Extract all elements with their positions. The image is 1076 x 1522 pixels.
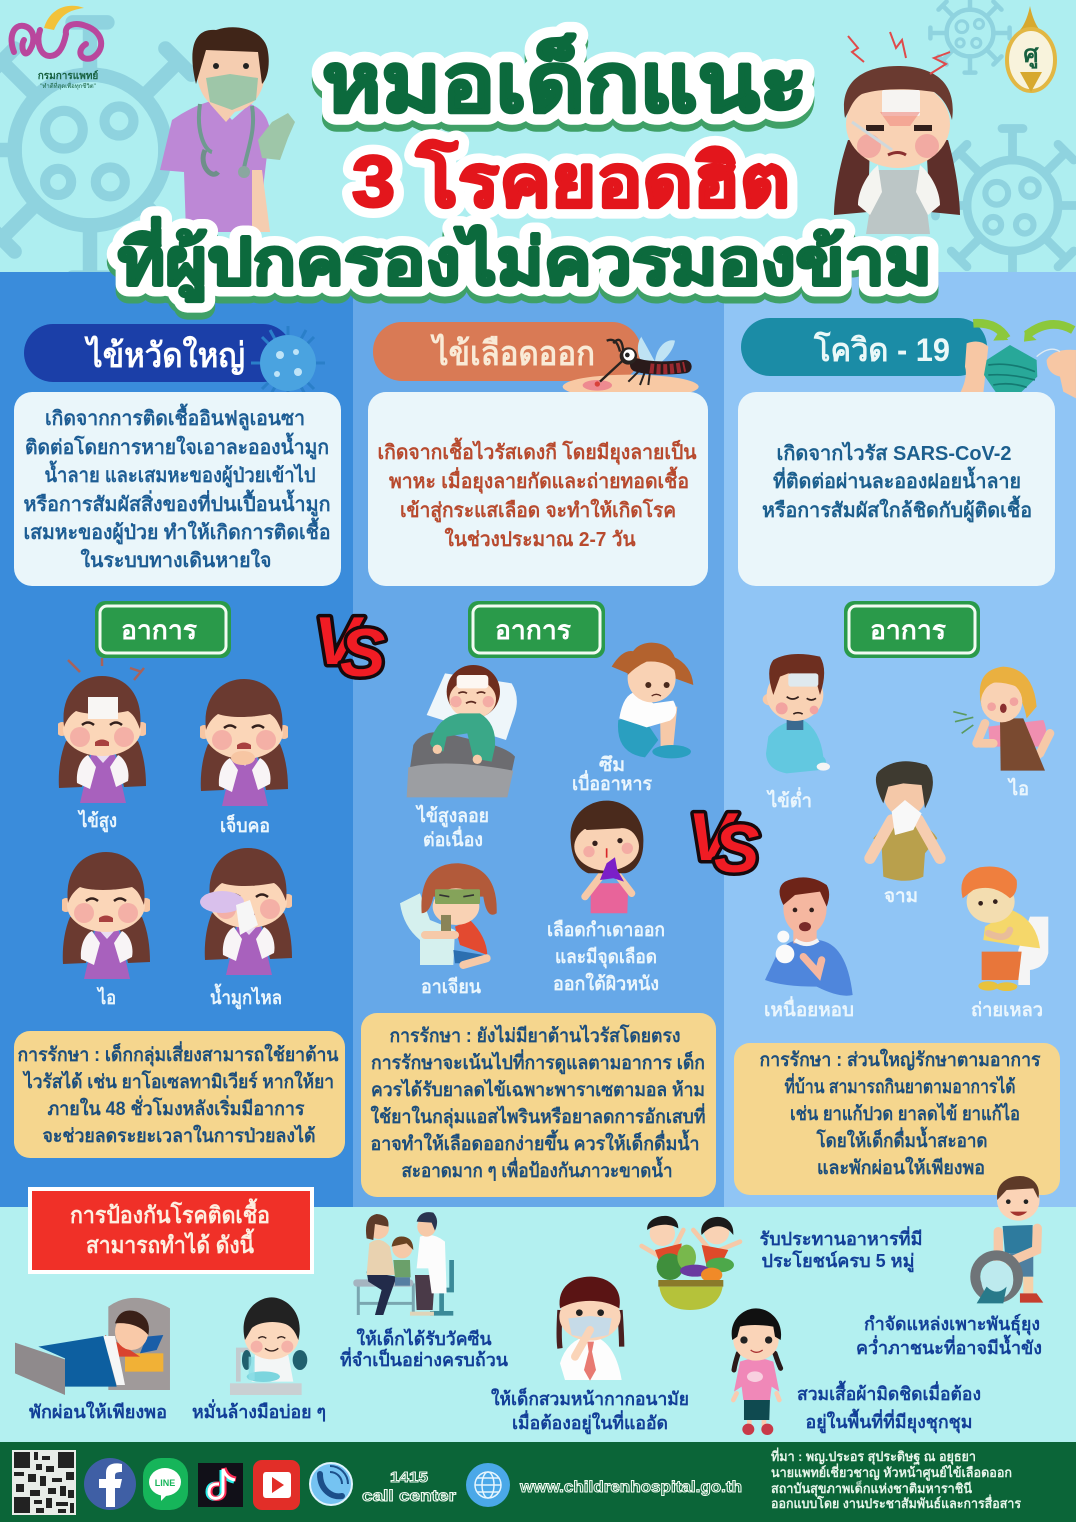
treatment card: covid-19: การรักษา : ส่วนใหญ่รักษาตามอาการ	[760, 1048, 1041, 1071]
info card: influenza: น้ำลาย และเสมหะของผู้ป่วยเข้าไป	[44, 460, 316, 489]
icon: VS badge 2: V	[688, 799, 739, 875]
icon: VS badge 2	[688, 799, 759, 887]
prevention heading: สามารถทำได้ ดังนี้	[86, 1228, 255, 1258]
prevention: eliminate breeding sites: กำจัดแหล่งเพาะพันธุ์ยุง	[864, 1313, 1040, 1336]
heading pill: influenza	[24, 324, 292, 382]
symptom: persistent high fever: ต่อเนื่อง	[423, 826, 483, 851]
symptom: nosebleed and skin bleeding: เลือดกำเดาออก	[547, 919, 665, 941]
top header background	[0, 0, 1076, 273]
heading pill: dengue: ไข้เลือดออก	[430, 333, 595, 373]
info card: dengue: เกิดจากเชื้อไวรัสเดงกี โดยมียุงลายเป็น	[378, 437, 697, 465]
treatment card: dengue: ใช้ยาในกลุ่มแอสไพรินหรือยาลดการอักเสบที่	[370, 1103, 706, 1129]
source credit: สถาบันสุขภาพเด็กแห่งชาติมหาราชินี	[771, 1479, 972, 1497]
icon: globe	[466, 1463, 510, 1507]
info card: dengue: เข้าสู่กระแสเลือด จะทำให้เกิดโรค	[400, 498, 676, 524]
heading pill: dengue	[373, 322, 641, 381]
icon: phone	[310, 1463, 352, 1505]
symptoms button: อาการ	[870, 615, 946, 645]
prevention: wash hands: หมั่นล้างมือบ่อย ๆ	[192, 1399, 326, 1422]
prevention: healthy food: รับประทานอาหารที่มี	[760, 1226, 922, 1249]
prevention: long clothing	[732, 1308, 981, 1435]
call center number	[362, 1469, 456, 1505]
prevention heading: การป้องกันโรคติดเชื้อ	[70, 1198, 270, 1228]
info card: dengue: ในช่วงประมาณ 2-7 วัน	[444, 527, 636, 551]
prevention: eliminate breeding sites	[856, 1176, 1043, 1358]
source credit: ออกแบบโดย งานประชาสัมพันธ์และการสื่อสาร	[771, 1494, 1021, 1511]
symptom: lethargic, loss of appetite: ซึม	[599, 754, 625, 776]
icon: VS badge 1: S	[340, 615, 385, 691]
symptoms button: อาการ	[121, 615, 197, 645]
info card: dengue: พาหะ เมื่อยุงลายกัดและถ่ายทอดเชื้อ	[389, 466, 689, 494]
prevention: wash hands	[192, 1297, 326, 1422]
call center number: call center	[362, 1488, 456, 1505]
symptom: persistent high fever: ไข้สูงลอย	[415, 804, 489, 828]
column backgrounds	[0, 272, 1076, 1208]
symptom: sore throat: เจ็บคอ	[220, 813, 270, 837]
symptom: sneeze: จาม	[884, 886, 918, 907]
panel: dengue	[361, 322, 716, 1197]
symptom: cough	[953, 667, 1050, 800]
symptom: sneeze	[870, 761, 940, 907]
symptom: vomiting: อาเจียน	[421, 976, 481, 998]
symptom: low fever	[763, 654, 830, 812]
panel: influenza	[14, 324, 345, 1158]
prevention: long clothing: สวมเสื้อผ้ามิดชิดเมื่อต้อง	[797, 1380, 981, 1404]
treatment card: covid-19: และพักผ่อนให้เพียงพอ	[817, 1156, 985, 1179]
prevention: vaccination: ที่จำเป็นอย่างครบถ้วน	[340, 1347, 509, 1370]
info card: influenza: ในระบบทางเดินหายใจ	[80, 548, 272, 572]
info card: influenza: ติดต่อโดยการหายใจเอาละอองน้ำมูก	[25, 432, 329, 461]
logo: hospital emblem	[1007, 6, 1055, 92]
title line 1: หมอเด็กแนะ	[322, 40, 808, 136]
prevention: vaccination	[340, 1212, 509, 1370]
symptom: cough: ไอ	[96, 986, 116, 1009]
symptom: shortness of breath	[764, 877, 854, 1021]
icon: blue virus	[251, 326, 325, 400]
treatment card: dengue: ควรได้รับยาลดไข้เฉพาะพาราเซตามอล ห้าม	[371, 1078, 705, 1101]
title line 2: 3 โรคยอดฮิต	[352, 138, 790, 222]
info card: influenza	[14, 392, 341, 586]
treatment card: covid-19: โดยให้เด็กดื่มน้ำสะอาด	[816, 1126, 988, 1152]
info card: covid-19: ที่ติดต่อผ่านละอองฝอยน้ำลาย	[773, 466, 1021, 493]
prevention: rest	[15, 1298, 170, 1422]
QR code	[12, 1450, 76, 1515]
icon: mosquito on skin	[563, 336, 699, 399]
symptom: lethargic, loss of appetite: เบื่ออาหาร	[572, 770, 653, 795]
symptom: low fever: ไข้ต่ำ	[766, 787, 812, 812]
heading pill: covid-19: โควิด - 19	[813, 331, 950, 368]
icon: VS badge 1: V	[314, 603, 365, 679]
treatment card: covid-19: เช่น ยาแก้ปวด ยาลดไข้ ยาแก้ไอ	[790, 1102, 1020, 1125]
icon: line	[143, 1458, 188, 1510]
logo: 72nd anniversary mark	[12, 6, 101, 90]
info card: covid-19: หรือการสัมผัสใกล้ชิดกับผู้ติดเชื้อ	[762, 495, 1032, 524]
prevention: wear mask: ให้เด็กสวมหน้ากากอนามัย	[491, 1387, 689, 1409]
info card: covid-19: เกิดจากไวรัส SARS-CoV-2	[776, 441, 1012, 465]
treatment card: covid-19: ที่บ้าน สามารถกินยาตามอาการได้	[784, 1073, 1016, 1098]
symptom: diarrhea	[961, 867, 1048, 1021]
symptom: nosebleed and skin bleeding: และมีจุดเลือด	[555, 946, 657, 969]
symptom: persistent high fever	[407, 665, 517, 851]
symptom: high fever: ไข้สูง	[77, 809, 117, 833]
icon: tiktok	[198, 1463, 243, 1507]
symptom: high fever	[56, 658, 148, 833]
symptom: sore throat	[198, 679, 290, 837]
call center number: 1415	[390, 1469, 428, 1486]
prevention: long clothing: อยู่ในพื้นที่ที่มียุงชุกชุม	[806, 1408, 972, 1434]
footer	[0, 1442, 1076, 1522]
symptom: lethargic, loss of appetite	[572, 643, 693, 795]
symptoms button: อาการ	[495, 615, 571, 645]
symptom: vomiting	[400, 863, 497, 998]
illustration: sick girl with fever	[834, 32, 960, 234]
treatment card: influenza: จะช่วยลดระยะเวลาในการป่วยลงได้	[42, 1124, 316, 1147]
symptom: cough: ไอ	[1007, 777, 1029, 800]
treatment card: dengue: สะอาดมาก ๆ เพื่อป้องกันภาวะขาดน้ำ	[402, 1156, 672, 1182]
title	[118, 33, 932, 309]
website: www.childrenhospital.go.th	[519, 1479, 742, 1496]
info card: influenza: หรือการสัมผัสสิ่งของที่ปนเปื้อนน้ำมูก	[24, 489, 330, 518]
info card: dengue	[368, 392, 708, 586]
prevention: healthy food	[642, 1216, 922, 1310]
symptoms button	[844, 601, 980, 658]
info card: covid-19	[738, 392, 1055, 586]
title line 3: ที่ผู้ปกครองไม่ควรมองข้าม	[118, 217, 932, 302]
treatment card: covid-19	[734, 1043, 1060, 1195]
prevention: healthy food: ประโยชน์ครบ 5 หมู่	[762, 1250, 914, 1273]
treatment card: dengue: การรักษาจะเน้นไปที่การดูแลตามอาการ เด็ก	[371, 1049, 705, 1075]
treatment card: influenza: ไวรัสได้ เช่น ยาโอเซลทามิเวียร์ หากให้ยา	[22, 1070, 334, 1093]
icon: VS badge 2: S	[714, 811, 759, 887]
symptom: nosebleed and skin bleeding	[547, 801, 665, 995]
title line 1: หมอเด็กแนะ	[322, 33, 808, 129]
info card: influenza: เกิดจากการติดเชื้ออินฟลูเอนซา	[45, 403, 305, 432]
treatment card: influenza	[14, 1031, 345, 1158]
panel: covid-19	[734, 318, 1076, 1195]
symptoms button	[95, 601, 231, 658]
treatment card: dengue: อาจทำให้เลือดออกง่ายขึ้น ควรให้เด็กดื่มน้ำ	[370, 1129, 700, 1155]
source credit: นายแพทย์เชี่ยวชาญ หัวหน้าศูนย์ไข้เลือดออก	[771, 1463, 1012, 1481]
heading pill: influenza: ไข้หวัดใหญ่	[84, 335, 245, 376]
source credit: ที่มา : พญ.ประอร สุประดิษฐ ณ อยุธยา	[771, 1447, 976, 1466]
illustration: doctor	[160, 27, 295, 232]
icon: hands holding mask	[960, 323, 1076, 398]
logo: 72nd anniversary mark: "ทำดีที่สุดเพื่อทุกชีวิต"	[40, 82, 96, 90]
symptom: runny nose: น้ำมูกไหล	[210, 983, 282, 1010]
logo: 72nd anniversary mark: กรมการแพทย์	[38, 70, 98, 82]
title line 3	[118, 217, 932, 309]
treatment card: influenza: ภายใน 48 ชั่วโมงหลังเริ่มมีอาการ	[48, 1095, 305, 1120]
prevention: eliminate breeding sites: คว่ำภาชนะที่อาจมีน้ำขัง	[856, 1334, 1042, 1358]
prevention heading	[30, 1189, 312, 1272]
logo: hospital emblem: ศู	[1023, 41, 1039, 69]
bottom prevention background	[0, 1207, 1076, 1443]
icon: VS badge 1	[314, 603, 385, 691]
background virus pattern	[0, 0, 1076, 283]
symptom: nosebleed and skin bleeding: ออกใต้ผิวหนัง	[553, 972, 659, 995]
prevention: rest: พักผ่อนให้เพียงพอ	[29, 1401, 167, 1422]
prevention: vaccination: ให้เด็กได้รับวัคซีน	[356, 1327, 492, 1349]
treatment card: dengue	[361, 1013, 716, 1197]
symptom: diarrhea: ถ่ายเหลว	[971, 1000, 1043, 1021]
prevention: wear mask	[491, 1277, 689, 1435]
symptoms button	[468, 601, 605, 658]
treatment card: influenza: การรักษา : เด็กกลุ่มเสี่ยงสามารถใช้ยาต้าน	[18, 1041, 338, 1067]
icon: line: LINE	[155, 1478, 175, 1488]
icon: youtube	[253, 1460, 300, 1510]
heading pill: covid-19	[741, 318, 987, 376]
source credit	[771, 1447, 1021, 1511]
info card: influenza: เสมหะของผู้ป่วย ทำให้เกิดการติดเชื้อ	[24, 517, 330, 546]
treatment card: dengue: การรักษา : ยังไม่มียาต้านไวรัสโดยตรง	[390, 1024, 680, 1047]
title line 1: หมอเด็กแนะ	[322, 33, 808, 129]
symptom: runny nose	[200, 848, 294, 1010]
icon: facebook	[84, 1458, 136, 1510]
title line 3: ที่ผู้ปกครองไม่ควรมองข้าม	[118, 224, 932, 309]
symptom: cough	[60, 852, 152, 1009]
prevention: wear mask: เมื่อต้องอยู่ในที่แออัด	[512, 1410, 668, 1435]
symptom: shortness of breath: เหนื่อยหอบ	[764, 996, 854, 1021]
title line 2: 3 โรคยอดฮิต	[352, 138, 790, 222]
title line 3: ที่ผู้ปกครองไม่ควรมองข้าม	[118, 217, 932, 302]
